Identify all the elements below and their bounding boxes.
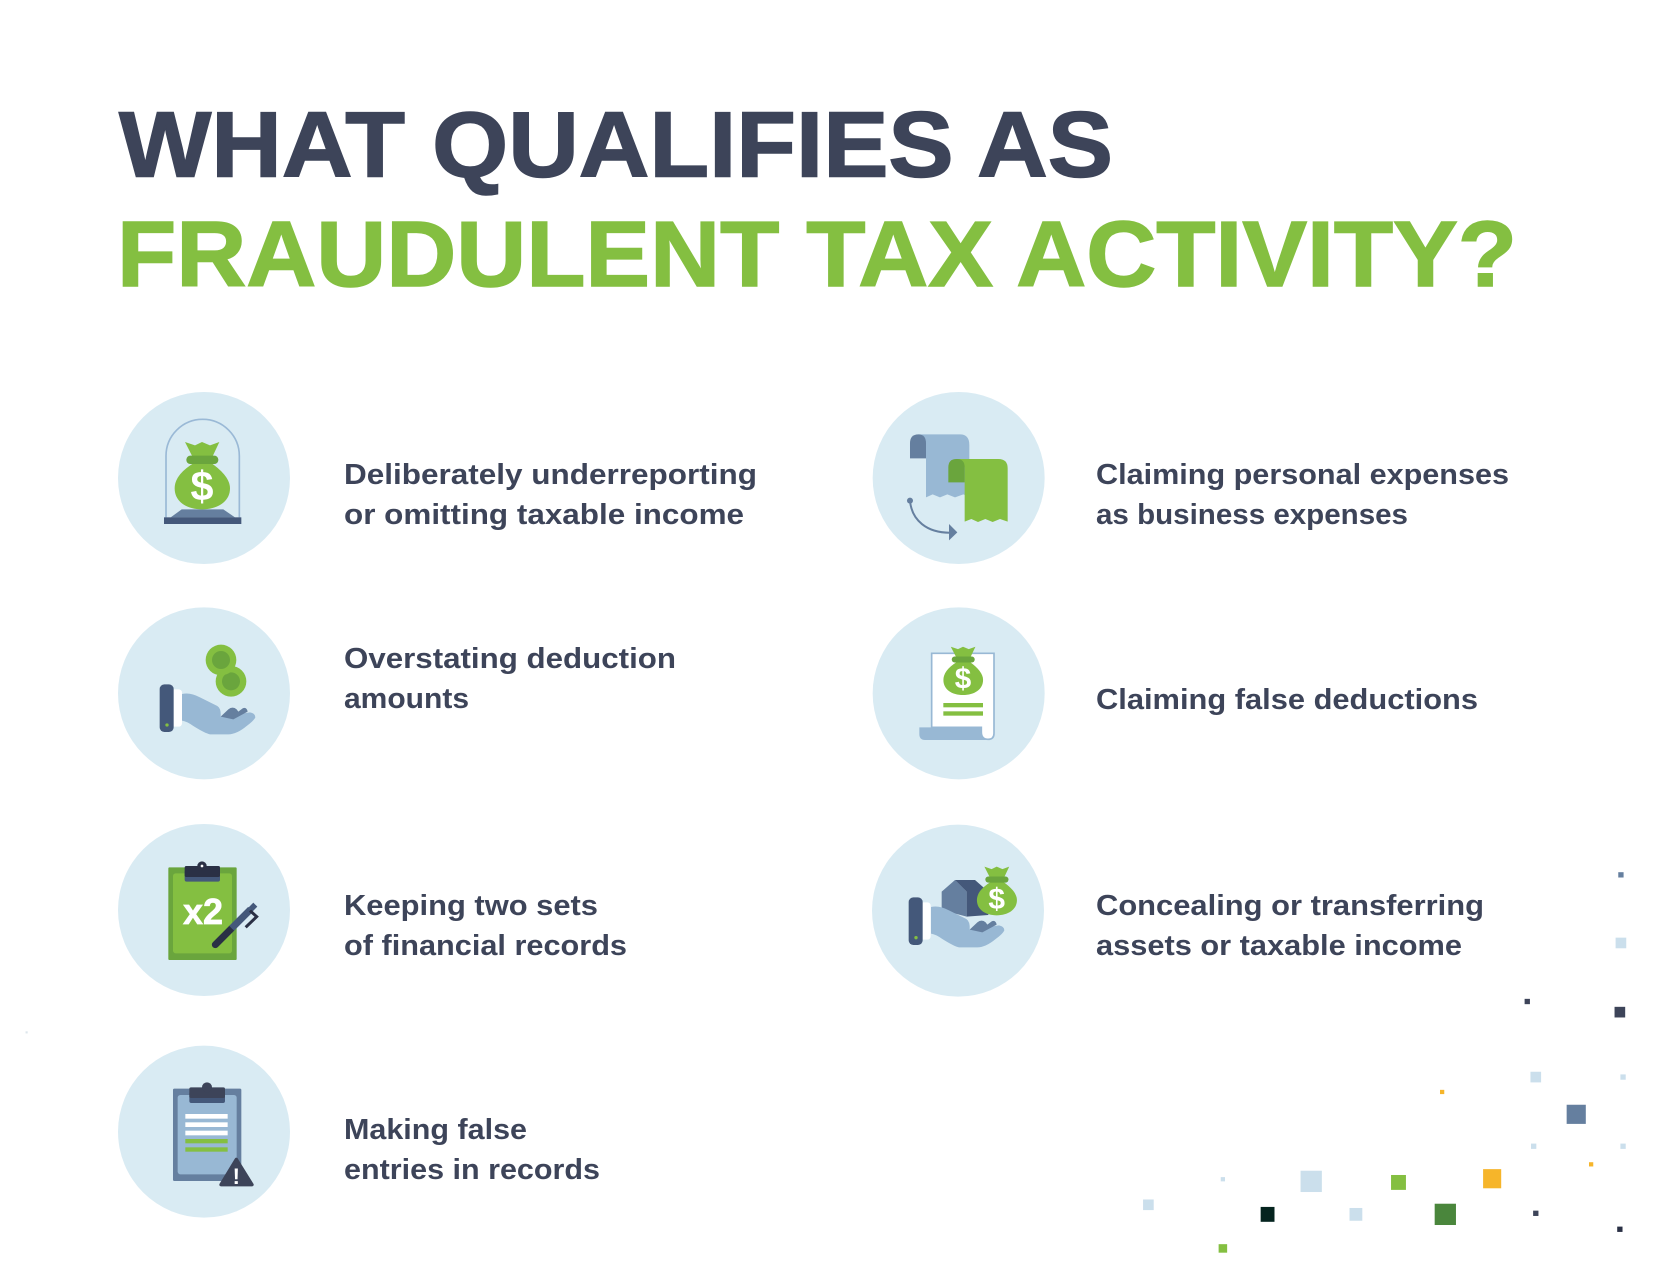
text: overstating deduction amounts xyxy=(344,643,676,715)
text: claiming false deductions: Claiming false deductions xyxy=(1096,684,1478,716)
panel: concealing assets xyxy=(872,825,1484,997)
text: making false entries: Making false xyxy=(344,1114,527,1146)
panel: deliberately underreporting income xyxy=(118,392,757,564)
icon: clipboard x2 with pen xyxy=(118,824,290,996)
text: overstating deduction amounts: amounts xyxy=(344,683,469,715)
text: keeping two sets xyxy=(344,890,627,962)
panel: overstating deductions xyxy=(118,607,676,779)
text: concealing or transferring: assets or taxable income xyxy=(1096,930,1462,962)
icon: receipt with money bag xyxy=(873,607,1045,779)
icon: hand holding house and money bag: $ xyxy=(988,883,1005,916)
icon: clipboard x2 with pen: x2 xyxy=(183,891,223,932)
text: concealing or transferring xyxy=(1096,890,1484,962)
icon: money bag under glass dome xyxy=(118,392,290,564)
icon: receipt with money bag: $ xyxy=(955,663,972,696)
icon: money bag under glass dome: $ xyxy=(190,463,213,509)
text: overstating deduction amounts: Overstating deduction xyxy=(344,643,676,675)
panel: personal expenses as business xyxy=(873,392,1509,564)
panel: false entries xyxy=(118,1046,600,1218)
decorative pixel squares xyxy=(26,872,1626,1253)
icon: two receipts with arrow xyxy=(873,392,1045,564)
text: keeping two sets: Keeping two sets xyxy=(344,890,598,922)
text: deliberately underreporting: or omitting taxable income xyxy=(344,499,744,531)
text: claiming personal expenses: as business expenses xyxy=(1096,499,1408,531)
text: making false entries xyxy=(344,1114,600,1186)
icon: clipboard with warning triangle: ! xyxy=(233,1164,240,1189)
icon: hand holding house and money bag xyxy=(872,825,1044,997)
panel: false deductions xyxy=(873,607,1478,779)
text: making false entries: entries in records xyxy=(344,1154,600,1186)
title line 2: FRAUDULENT TAX ACTIVITY? xyxy=(117,202,1517,306)
title xyxy=(117,92,1517,306)
text: claiming personal expenses: Claiming personal expenses xyxy=(1096,459,1509,491)
text: deliberately underreporting xyxy=(344,459,757,531)
icon: hand with coins xyxy=(118,607,290,779)
icon: clipboard with warning triangle xyxy=(118,1046,290,1218)
text: claiming personal expenses xyxy=(1096,459,1509,531)
text: deliberately underreporting: Deliberately underreporting xyxy=(344,459,757,491)
text: concealing or transferring: Concealing or transferring xyxy=(1096,890,1484,922)
title line 1: WHAT QUALIFIES AS xyxy=(119,92,1113,196)
panel: two sets of records xyxy=(118,824,627,996)
text: keeping two sets: of financial records xyxy=(344,930,627,962)
